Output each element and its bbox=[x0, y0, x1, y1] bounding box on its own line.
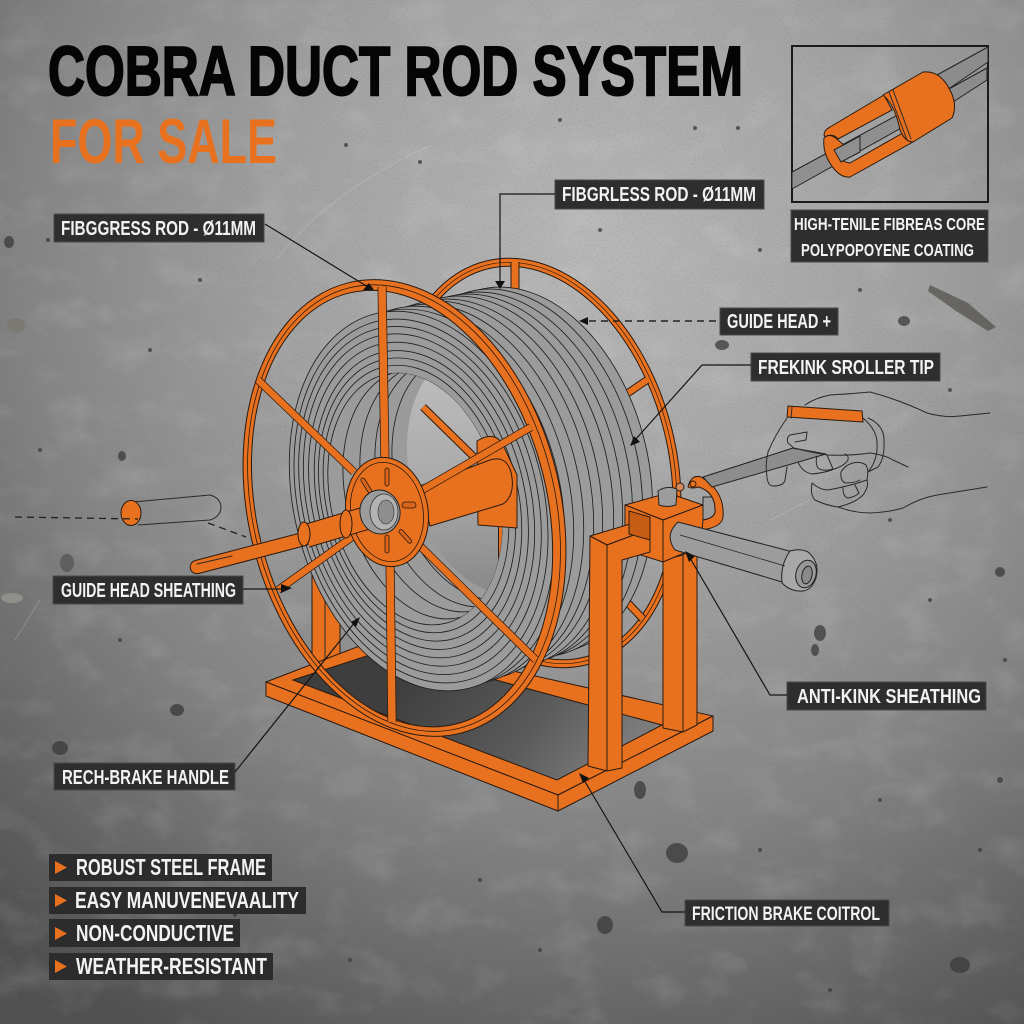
feature: easy manoeuvrability: EASY MANUVENEVAALITY bbox=[75, 887, 299, 913]
front reel flange bbox=[197, 245, 612, 771]
knob bbox=[658, 483, 684, 506]
title: COBRA DUCT ROD SYSTEM bbox=[48, 32, 743, 110]
brake rod bbox=[703, 448, 826, 487]
hub disc bbox=[337, 451, 437, 573]
callout: anti-kink sheathing bbox=[685, 551, 986, 710]
orange handle bar bbox=[787, 406, 863, 422]
feature: non-conductive: NON-CONDUCTIVE bbox=[76, 920, 234, 946]
callout: friction brake: FRICTION BRAKE COITROL bbox=[692, 904, 880, 925]
reel axle bbox=[420, 436, 517, 528]
right stand bbox=[588, 493, 703, 771]
front flange spokes bbox=[258, 287, 536, 722]
hub boss bbox=[356, 487, 404, 537]
callout: guide head: GUIDE HEAD + bbox=[727, 311, 831, 333]
callout: brake handle bbox=[54, 617, 360, 790]
feature list bbox=[49, 854, 306, 980]
feature: easy manoeuvrability bbox=[49, 887, 306, 914]
brake bracket bbox=[688, 476, 723, 530]
callout: friction brake bbox=[579, 773, 889, 926]
callout: fiberglass rod top: FIBGRLESS ROD - Ø11MM bbox=[562, 184, 756, 206]
callout: anti-kink sheathing: ANTI-KINK SHEATHING bbox=[797, 686, 981, 708]
inset caption: POLYPOPOYENE COATING bbox=[801, 240, 974, 260]
feature: non-conductive bbox=[49, 919, 240, 947]
inset caption bbox=[791, 210, 988, 262]
base frame bbox=[266, 640, 713, 811]
subtitle: FOR SALE bbox=[50, 107, 277, 177]
callout: roller tip: FREKINK SROLLER TIP bbox=[758, 357, 934, 379]
hand on brake handle bbox=[766, 392, 990, 513]
detail inset: rod sheathing bbox=[792, 46, 988, 202]
coiled duct rod bbox=[288, 286, 653, 692]
callout: fiberglass rod left: FIBGGRESS ROD - Ø11MM bbox=[61, 218, 256, 240]
feature: robust steel frame: ROBUST STEEL FRAME bbox=[76, 854, 266, 880]
callout: fiberglass rod left bbox=[54, 214, 374, 290]
grey handle cylinder bbox=[670, 522, 819, 591]
callout: sample dashed leader bbox=[15, 517, 246, 537]
back reel flange bbox=[350, 227, 722, 699]
loose rod sample bbox=[121, 495, 221, 526]
callout: guide head bbox=[579, 308, 838, 335]
feature: weather-resistant bbox=[49, 953, 273, 980]
guide rod shaft bbox=[197, 510, 380, 567]
callout: roller tip bbox=[630, 353, 940, 446]
rear frame upright bbox=[312, 572, 340, 672]
feature: weather-resistant: WEATHER-RESISTANT bbox=[76, 953, 267, 979]
back flange spokes bbox=[515, 262, 647, 619]
callout: guide head sheathing: GUIDE HEAD SHEATHING bbox=[61, 580, 236, 602]
callout: brake handle: RECH-BRAKE HANDLE bbox=[62, 767, 229, 789]
callout: fiberglass rod top bbox=[495, 180, 764, 289]
feature: robust steel frame bbox=[49, 854, 272, 881]
